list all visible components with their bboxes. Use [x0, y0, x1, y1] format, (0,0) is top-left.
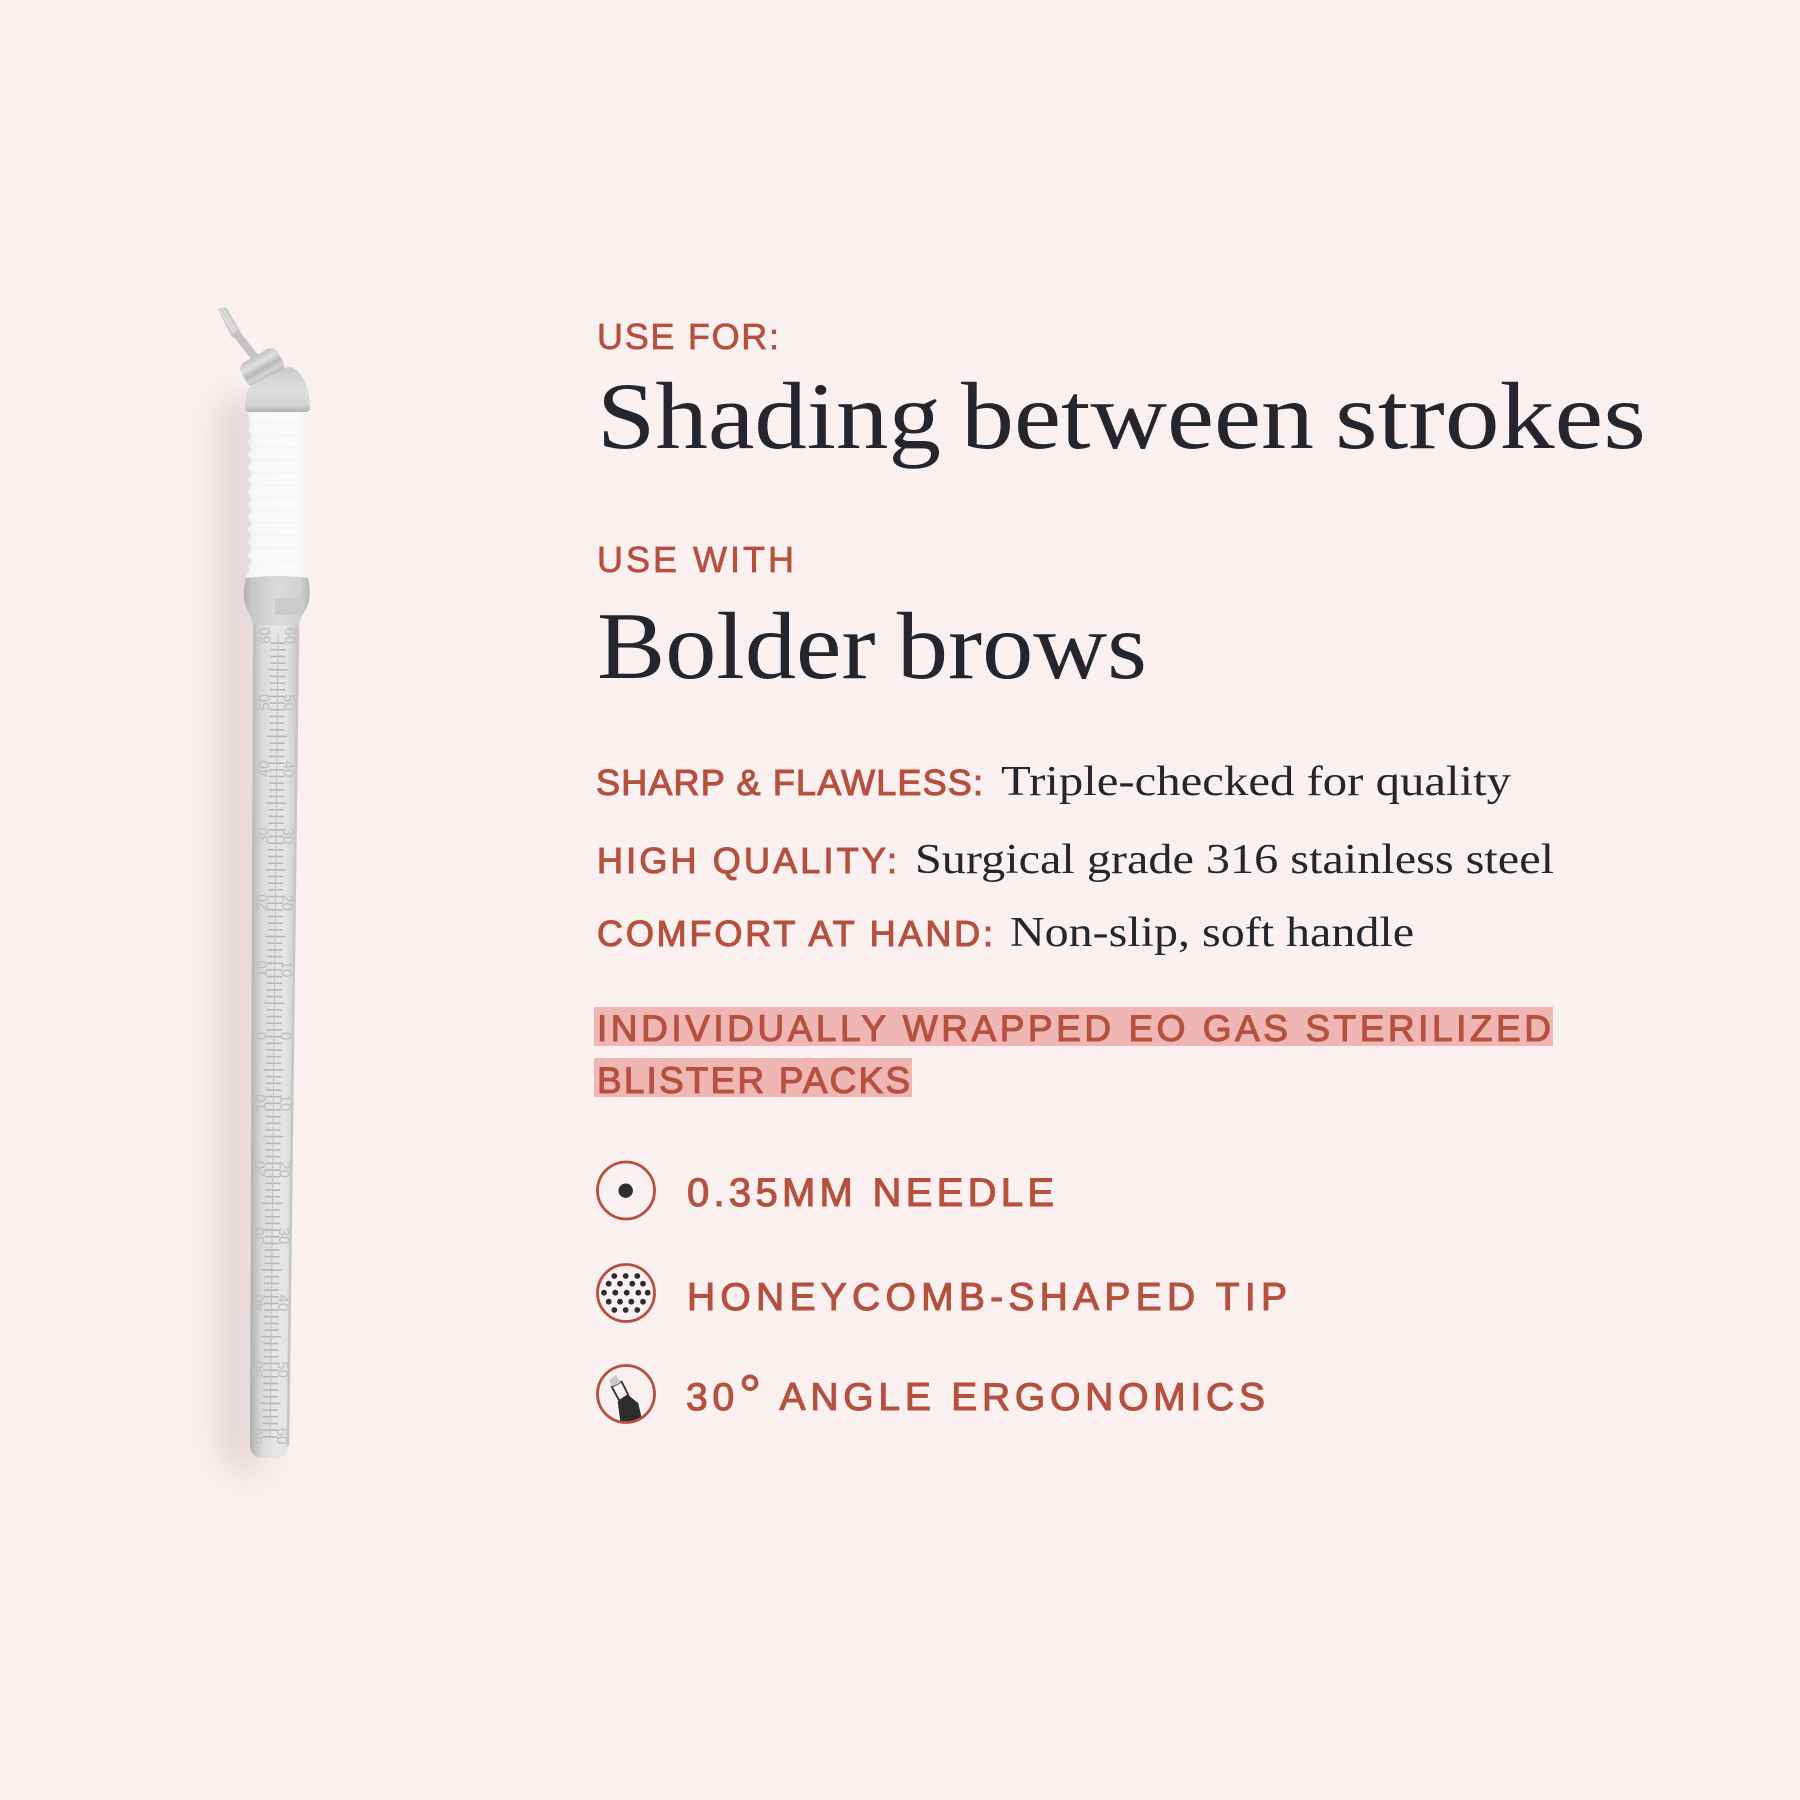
feature: comfort at hand: Non-slip, soft handle — [1010, 910, 1414, 956]
feature: comfort at hand: COMFORT AT HAND: — [597, 913, 993, 954]
measurement scale: 40 — [274, 1294, 291, 1311]
measurement scale: 0 — [277, 1032, 294, 1040]
heading: shading between strokes: between — [961, 363, 1314, 469]
measurement scale: 30 — [275, 1228, 292, 1245]
pen shadow — [222, 400, 272, 1470]
feature: sharp and flawless — [596, 759, 1511, 805]
heading: bolder brows: Bolder brows — [597, 593, 1147, 699]
measurement scale: 40 — [250, 1294, 267, 1311]
spec row: needle size — [598, 1162, 1054, 1219]
measurement scale: 60 — [273, 1428, 290, 1445]
lower metal section — [244, 576, 310, 626]
pen head — [245, 367, 310, 412]
measurement scale: 50 — [280, 694, 297, 711]
angle ergonomics text: 30 — [686, 1376, 734, 1419]
measurement scale: 60 — [249, 1427, 266, 1444]
measurement scale: 40 — [280, 761, 297, 778]
needle size text: 0.35MM NEEDLE — [687, 1171, 1054, 1215]
needle — [218, 307, 257, 360]
measurement scale: 10 — [276, 1094, 293, 1111]
measurement scale: 50 — [256, 694, 273, 711]
icon: single needle dot — [598, 1162, 654, 1219]
measurement scale: 30 — [255, 827, 272, 844]
measurement scale: 20 — [278, 894, 295, 911]
feature: comfort at hand — [597, 910, 1414, 956]
measurement scale — [249, 627, 298, 1445]
highlighted callout: sterilized packaging: INDIVIDUALLY WRAPPED EO GAS STERILIZED — [597, 1008, 1551, 1049]
feature: sharp and flawless: SHARP & FLAWLESS: — [596, 762, 983, 803]
measurement scale: 50 — [274, 1361, 291, 1378]
measurement scale: 30 — [279, 827, 296, 844]
microblade pen illustration — [218, 307, 310, 1470]
measurement scale: 10 — [278, 961, 295, 978]
needle collar — [237, 345, 287, 390]
measurement scale: 60 — [257, 627, 274, 644]
measurement scale: 20 — [252, 1161, 269, 1178]
measurement scale: 20 — [254, 894, 271, 911]
measurement scale: 40 — [256, 760, 273, 777]
soft ribbed grip — [246, 412, 308, 579]
heading: shading between strokes: strokes — [1335, 363, 1646, 469]
icon: honeycomb tip — [598, 1264, 654, 1322]
feature: high quality — [597, 837, 1554, 883]
grip ribs — [251, 422, 303, 570]
icon: angled tool — [598, 1366, 654, 1425]
measurement scale: 10 — [254, 960, 271, 977]
label: use for: USE FOR: — [597, 316, 779, 357]
measurement scale: 0 — [253, 1032, 270, 1040]
angle ergonomics text: ° — [739, 1363, 761, 1426]
highlighted callout: sterilized packaging — [594, 1007, 1553, 1101]
honeycomb tip text: HONEYCOMB-SHAPED TIP — [687, 1276, 1287, 1319]
highlighted callout: sterilized packaging: BLISTER PACKS — [597, 1060, 910, 1101]
angle ergonomics text: ANGLE ERGONOMICS — [766, 1376, 1265, 1419]
measurement scale: 10 — [252, 1094, 269, 1111]
heading: shading between strokes: Shading — [597, 363, 941, 469]
spec row: angle ergonomics — [598, 1363, 1265, 1426]
measurement scale: 20 — [276, 1161, 293, 1178]
label: use with: USE WITH — [597, 539, 794, 580]
shaft — [250, 625, 299, 1458]
measurement scale: 50 — [250, 1361, 267, 1378]
spec row: honeycomb tip — [598, 1264, 1287, 1322]
measurement scale: 30 — [251, 1227, 268, 1244]
feature: high quality: Surgical grade 316 stainless steel — [915, 837, 1554, 883]
feature: sharp and flawless: Triple-checked for quality — [1001, 759, 1511, 805]
measurement scale: 60 — [281, 627, 298, 644]
textured patch — [275, 598, 305, 615]
feature: high quality: HIGH QUALITY: — [597, 840, 897, 881]
shaft right edge — [288, 630, 298, 1446]
